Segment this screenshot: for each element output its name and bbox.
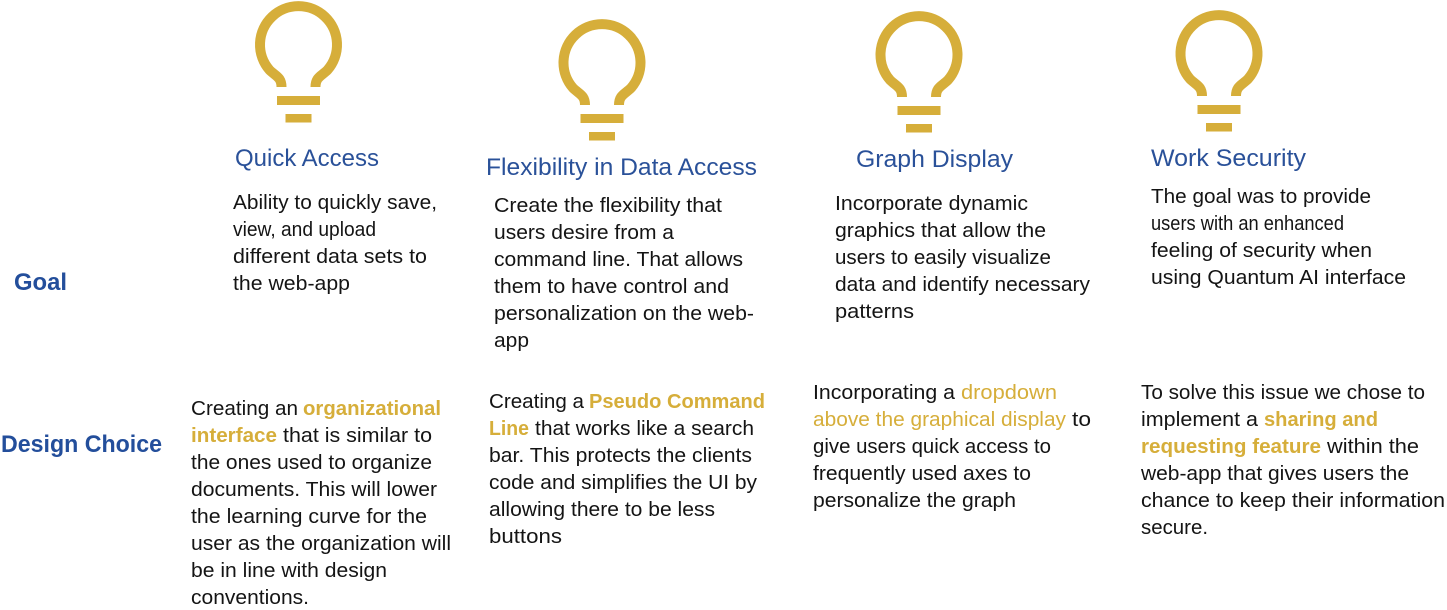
heading: Flexibility in Data Access: Flexibility in Data Access: [486, 154, 757, 181]
goal text: [233, 191, 437, 295]
goal text: personalization on the web-: [494, 302, 754, 325]
design choice text: bar. This protects the clients: [489, 444, 752, 467]
goal text: command line. That allows: [494, 248, 743, 271]
design choice text: secure.: [1141, 516, 1208, 539]
heading: Graph Display: Graph Display: [856, 146, 1014, 173]
design choice text: code and simplifies the UI by: [489, 471, 758, 494]
heading: Quick Access: Quick Access: [235, 145, 379, 172]
design choice text: conventions.: [191, 586, 309, 609]
goal text: using Quantum AI interface: [1151, 266, 1406, 289]
design choice text: To solve this issue we chose to: [1141, 381, 1425, 404]
row label: Goal: Goal: [14, 269, 67, 296]
design choice text: Creating an: [191, 397, 298, 420]
icon: light bulb: [564, 24, 640, 141]
design choice text: Pseudo Command: [589, 390, 765, 413]
design choice text: web-app that gives users the: [1140, 462, 1409, 485]
design choice text: within the: [1326, 435, 1419, 458]
design choice text: give users quick access to: [813, 435, 1051, 458]
goal text: users desire from a: [494, 221, 675, 244]
design choice text: requesting feature: [1141, 435, 1321, 458]
design choice text: user as the organization will: [191, 532, 451, 555]
icon: light bulb: [260, 6, 337, 123]
icon: light bulb: [880, 16, 958, 133]
goal text: [494, 194, 754, 352]
design choice text: sharing and: [1264, 408, 1378, 431]
design choice text: Creating a: [489, 390, 585, 413]
goal text: them to have control and: [494, 275, 729, 298]
goal text: feeling of security when: [1151, 239, 1372, 262]
column: Work Security: [1140, 15, 1445, 539]
row label: Design Choice: Design Choice: [1, 431, 162, 458]
design choice text: the learning curve for the: [191, 505, 427, 528]
goal text: patterns: [835, 300, 914, 323]
goal text: data and identify necessary: [835, 273, 1091, 296]
column: Flexibility in Data Access: [486, 24, 765, 548]
goal text: users with an enhanced: [1151, 212, 1344, 235]
goal text: Ability to quickly save,: [233, 191, 437, 214]
design choice text: Incorporating a: [813, 381, 956, 404]
column: Graph Display: [813, 16, 1091, 512]
design choice text: [191, 397, 451, 609]
goal text: graphics that allow the: [835, 219, 1046, 242]
goal text: app: [494, 329, 529, 352]
design choice text: that is similar to: [283, 424, 432, 447]
design choice text: frequently used axes to: [813, 462, 1031, 485]
design choice text: the ones used to organize: [191, 451, 432, 474]
design choice text: personalize the graph: [813, 489, 1016, 512]
design choice text: buttons: [489, 525, 562, 548]
design choice text: allowing there to be less: [489, 498, 715, 521]
design choice text: [813, 381, 1091, 512]
goal text: different data sets to: [233, 245, 427, 268]
design choice text: Line: [489, 417, 529, 440]
design choice text: [1140, 381, 1445, 539]
design choice text: dropdown: [961, 381, 1057, 404]
goal text: the web-app: [233, 272, 350, 295]
design choice text: chance to keep their information: [1141, 489, 1445, 512]
goal text: The goal was to provide: [1151, 185, 1371, 208]
design choice text: interface: [191, 424, 277, 447]
goal text: [1151, 185, 1406, 289]
heading: Work Security: Work Security: [1151, 145, 1307, 172]
design choice text: be in line with design: [191, 559, 387, 582]
goal text: view, and upload: [233, 218, 376, 241]
design choice text: [489, 390, 765, 548]
design choice text: implement a: [1141, 408, 1259, 431]
goal text: Create the flexibility that: [494, 194, 722, 217]
design choice text: organizational: [303, 397, 441, 420]
column: Quick Access: [191, 6, 451, 609]
design choice text: documents. This will lower: [191, 478, 437, 501]
design choice text: to: [1072, 408, 1091, 431]
goal text: Incorporate dynamic: [835, 192, 1028, 215]
icon: light bulb: [1180, 15, 1258, 132]
goal text: users to easily visualize: [835, 246, 1051, 269]
design choice text: above the graphical display: [813, 408, 1067, 431]
goal text: [835, 192, 1091, 323]
design choice text: that works like a search: [535, 417, 754, 440]
